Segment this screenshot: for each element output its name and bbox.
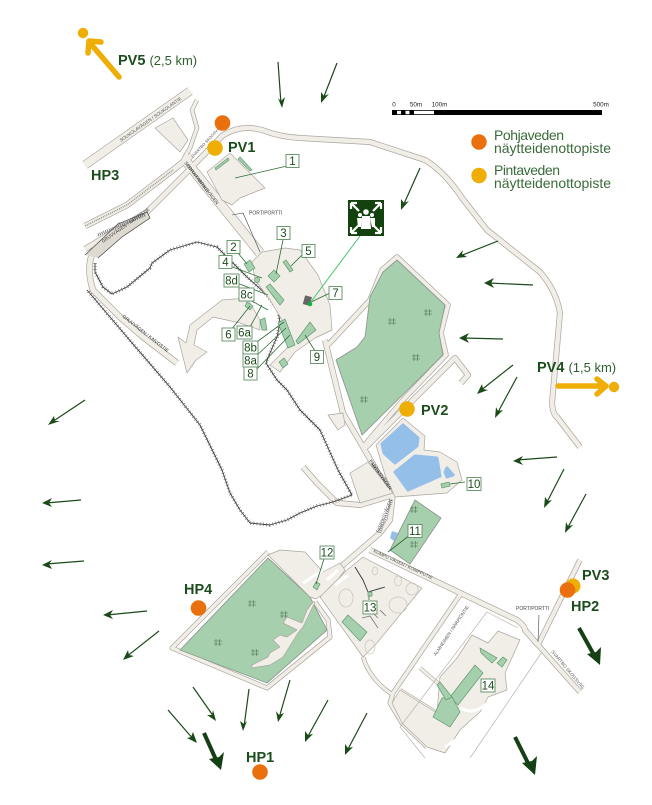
numbered labels: 5: [305, 246, 312, 258]
scale bar: 100m: [432, 102, 447, 108]
numbered labels: 8: [247, 368, 254, 380]
arrow: PV4 direction: [558, 379, 619, 394]
scale bar: 50m: [410, 102, 422, 108]
scale bar: [392, 102, 609, 115]
tree cross marks: [214, 309, 432, 656]
port markers: PORT/PORTTI: [516, 606, 549, 612]
assembly point marker dot: [308, 302, 312, 306]
legend: näytteidenottopiste: [494, 140, 611, 156]
sampling point labels: HP1: [246, 750, 274, 766]
road names: FABRIKSVÄGEN: [374, 498, 393, 533]
site areas: [155, 118, 542, 758]
numbered labels: 8b: [244, 342, 257, 354]
numbered labels: 7: [332, 288, 339, 300]
numbered labels: 3: [280, 228, 287, 240]
sampling point labels: PV4 (1,5 km): [537, 360, 616, 376]
port markers: PORT/PORTTI: [249, 210, 282, 216]
water and green areas: [180, 260, 462, 683]
road names: ÄLMHEIMEN / NÄRPIÖNTIE: [432, 604, 470, 657]
numbered labels: 8a: [244, 356, 257, 368]
legend: Pintaveden: [494, 162, 560, 178]
sampling point labels: PV2: [421, 403, 448, 419]
sampling point labels: HP3: [91, 168, 119, 184]
road names: SOUKOLAVÄGEN / SOUKOLANTIE: [118, 95, 183, 143]
rock face hachure lines: [85, 212, 352, 525]
numbered labels: 2: [230, 242, 237, 254]
numbered labels: 10: [468, 479, 480, 491]
sampling point labels: [91, 53, 616, 766]
numbered labels: 6: [225, 330, 232, 342]
numbered labels: 4: [222, 257, 229, 269]
numbered labels: 6a: [238, 328, 251, 340]
arrow: PV5 direction: [78, 28, 119, 77]
numbered labels: 13: [364, 602, 376, 614]
road names: SODRA FABRIKSVÄGEN: [183, 160, 220, 205]
numbered labels: 12: [321, 548, 333, 560]
legend: näytteidenottopiste: [494, 175, 611, 191]
port markers: [232, 210, 549, 642]
numbered labels: 1: [289, 156, 296, 168]
sampling point dots: [191, 115, 580, 780]
legend: [471, 127, 611, 191]
road names: KUMPU VÄGEN / KOMPPUTIE: [373, 547, 434, 580]
road names: GRUVVÄGEN / KAIVOSTIE: [121, 313, 170, 353]
road names: GRUVVÄGEN / KAIVOSTIE: [100, 206, 151, 244]
numbered labels: [219, 154, 495, 692]
road names: FABRIKSVÄGEN: [368, 458, 393, 491]
road names: SVARTBO SKOGSVÄG: [190, 124, 223, 159]
numbered labels: 14: [482, 680, 495, 692]
scale bar: 0: [392, 102, 396, 108]
scale bar: 500m: [593, 102, 609, 108]
sampling point labels: PV5 (2,5 km): [118, 53, 197, 69]
road names: [100, 95, 587, 690]
icon: assembly point: [348, 200, 384, 236]
sampling point labels: HP2: [571, 599, 599, 615]
assembly point leader: [310, 236, 360, 303]
leader lines: [230, 166, 465, 600]
sampling point labels: HP4: [184, 582, 212, 598]
road names: SVARTBO SKOGSVÄG: [550, 649, 587, 690]
legend: Pohjaveden: [494, 127, 564, 143]
numbered labels: 8d: [225, 276, 238, 288]
numbered labels: 11: [409, 526, 421, 538]
flow arrows: [42, 62, 601, 775]
road network: [85, 91, 580, 747]
numbered labels: 8c: [240, 290, 253, 302]
sampling point labels: PV3: [582, 568, 609, 584]
sampling point labels: PV1: [228, 140, 255, 156]
numbered labels: 9: [314, 352, 320, 364]
green building footprints: [215, 157, 507, 727]
